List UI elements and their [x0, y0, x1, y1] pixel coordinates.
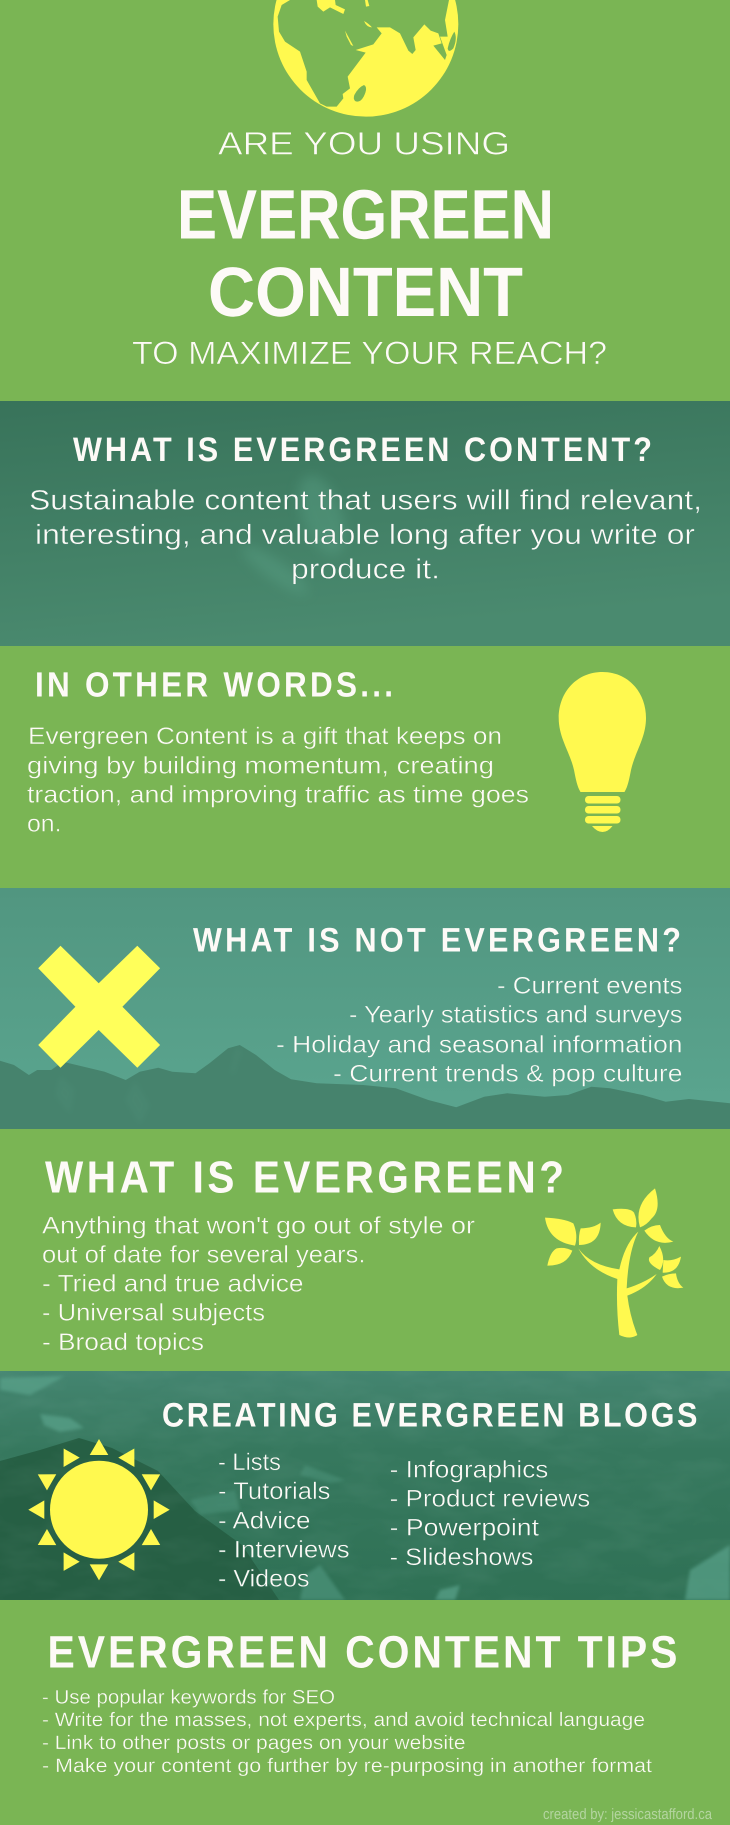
text block: definition: Sustainable content that users will find relevant,: [29, 484, 702, 515]
list: left column: [218, 1449, 350, 1593]
panel: what is evergreen: [0, 1129, 730, 1371]
panel: evergreen content tips: [0, 1600, 730, 1825]
list: tips: - Use popular keywords for SEO: [42, 1686, 335, 1708]
heading: EVERGREEN CONTENT TIPS: [48, 1627, 677, 1678]
heading: WHAT IS NOT EVERGREEN?: [193, 922, 681, 960]
list: right column: - Powerpoint: [390, 1515, 539, 1542]
panel: what is evergreen content: [0, 401, 730, 646]
icon: light bulb: [559, 672, 646, 832]
panel: what is not evergreen: [0, 888, 730, 1129]
list: left column: - Advice: [218, 1507, 310, 1534]
list: left column: - Interviews: [218, 1536, 350, 1563]
list: left column: - Tutorials: [218, 1478, 330, 1505]
list: not evergreen: - Current trends & pop culture: [333, 1060, 682, 1087]
heading: CREATING EVERGREEN BLOGS: [162, 1397, 697, 1435]
list: left column: - Videos: [218, 1566, 310, 1593]
list: tips: - Write for the masses, not experts, and avoid technical language: [42, 1709, 645, 1731]
mountain range: [0, 1045, 730, 1129]
text block: Anything that won't go out of style or: [42, 1212, 475, 1239]
list: not evergreen: - Current events: [497, 972, 682, 999]
list: right column: [390, 1457, 590, 1571]
icon: globe: [273, 0, 458, 117]
list: right column: - Infographics: [390, 1457, 548, 1484]
list: right column: - Slideshows: [390, 1544, 534, 1571]
list: tips: - Make your content go further by re-purposing in another format: [42, 1755, 653, 1777]
text block: definition: interesting, and valuable long after you write or: [35, 519, 695, 550]
icon: sun: [28, 1439, 170, 1580]
text block: giving by building momentum, creating: [27, 752, 494, 779]
text block: - Universal subjects: [42, 1300, 265, 1327]
list: left column: - Lists: [218, 1449, 281, 1476]
list: tips: - Link to other posts or pages on your website: [42, 1732, 466, 1754]
text block: on.: [27, 811, 62, 838]
text block: - Tried and true advice: [42, 1271, 304, 1298]
panel: creating evergreen blogs: [0, 1371, 730, 1600]
text block: definition: [29, 484, 702, 585]
text block: [42, 1212, 475, 1356]
icon: x mark: [38, 946, 160, 1068]
title: evergreen: EVERGREEN: [177, 176, 554, 254]
panel: header: [133, 0, 606, 364]
text block: - Broad topics: [42, 1329, 204, 1356]
text block: [27, 723, 529, 838]
heading: IN OTHER WORDS...: [35, 666, 393, 705]
icon: tree: [545, 1188, 683, 1337]
list: not evergreen: - Holiday and seasonal information: [276, 1031, 682, 1058]
list: tips: [42, 1686, 653, 1777]
heading: WHAT IS EVERGREEN CONTENT?: [73, 431, 652, 469]
panel: in other words: [0, 646, 730, 888]
text block: Evergreen Content is a gift that keeps on: [28, 723, 502, 750]
text block: traction, and improving traffic as time goes: [27, 781, 529, 808]
list: not evergreen: - Yearly statistics and surveys: [349, 1002, 682, 1029]
list: not evergreen: [276, 972, 682, 1087]
text: are you using: ARE YOU USING: [218, 125, 510, 161]
text: to maximize your reach: TO MAXIMIZE YOUR REACH?: [132, 335, 607, 371]
text block: definition: produce it.: [291, 554, 440, 585]
text block: out of date for several years.: [42, 1241, 366, 1268]
heading: WHAT IS EVERGREEN?: [45, 1152, 564, 1203]
title: content: CONTENT: [208, 253, 523, 331]
list: right column: - Product reviews: [390, 1486, 590, 1513]
